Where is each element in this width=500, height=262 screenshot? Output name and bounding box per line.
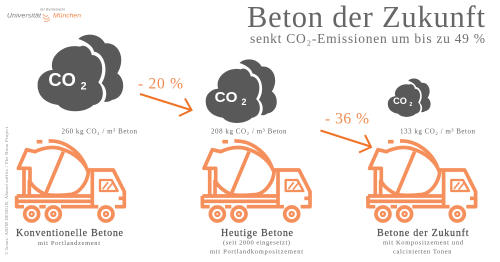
icon: CO2 cloud small: CO [393,96,407,106]
caption: concrete of the future [377,228,469,256]
caption: conventional concrete: mit Portlandzement [38,240,100,247]
caption: today's concrete [210,228,303,256]
logo: university: der Bundeswehr [40,8,66,12]
icon: CO2 cloud small: 2 [409,102,412,108]
icon: CO2 cloud medium: 2 [241,97,246,107]
arrow: first reduction [140,94,192,116]
logo: university: Universität [7,12,42,20]
credit: vertical icon attribution: © Icons: AIOM DESIGN, Ahmed soffits / The Noun Project [4,126,10,255]
icon: CO2 cloud small [388,79,431,117]
logo: university: München [53,12,81,20]
caption: concrete of the future: Betone der Zukunft [377,228,469,239]
icon: CO2 cloud large [38,35,123,111]
caption: today's concrete: Heutige Betone [221,228,294,239]
title: Beton der Zukunft [247,0,486,34]
caption: concrete of the future: mit Kompositzement und [383,240,464,246]
icon: concrete truck 2 [202,141,310,221]
caption: conventional concrete [16,228,124,247]
label: reduction 36 percent: - 36 % [325,110,369,128]
value: 208 kg: 208 kg CO₂ / m³ Beton [211,128,287,136]
caption: today's concrete: (seit 2000 eingesetzt) [223,240,290,246]
icon: concrete truck 1 [17,141,124,221]
caption: conventional concrete: Konventionelle Betone [16,228,124,239]
label: reduction 20 percent: - 20 % [138,76,183,92]
icon: CO2 cloud medium: CO [215,89,238,106]
caption: today's concrete: mit Portlandkompositzement [210,248,303,256]
arrow: second reduction [320,130,371,152]
icon: CO2 cloud medium [206,59,277,123]
icon: CO2 cloud large: 2 [81,81,87,93]
logo: university [7,8,81,21]
caption: concrete of the future: calcinierten Tonen [393,248,452,256]
value: 133 kg: 133 kg CO₂ / m³ Beton [400,128,476,136]
value: 260 kg: 260 kg CO₂ / m³ Beton [62,128,138,136]
subtitle: senkt CO₂-Emissionen um bis zu 49 % [250,31,485,46]
icon: CO2 cloud large: CO [48,69,76,90]
icon: concrete truck 3 [368,141,476,221]
